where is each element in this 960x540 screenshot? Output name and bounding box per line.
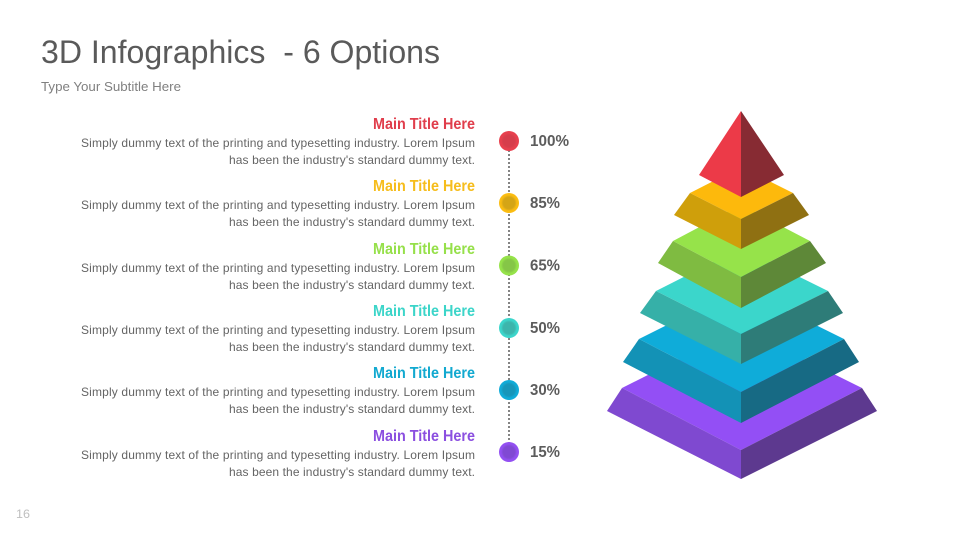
value: 65%: 65%: [530, 258, 560, 274]
marker: red dot: [499, 131, 519, 151]
marker: yellow dot: [499, 193, 519, 213]
option 3 text: [81, 241, 475, 292]
option 2 text: Main Title Here: [373, 178, 475, 195]
value: 15%: 15%: [530, 444, 560, 461]
option 5 text: [81, 365, 475, 416]
option 1 text: [81, 116, 475, 167]
option 3 text: has been the industry's standard dummy text.: [229, 278, 475, 292]
layer: yellow: [674, 167, 809, 249]
3D pyramid: [607, 111, 877, 479]
option 6 text: Main Title Here: [373, 428, 475, 445]
marker: green dot: [499, 256, 519, 276]
layer: purple base: [607, 328, 877, 479]
option 2 text: Simply dummy text of the printing and typesetting industry. Lorem Ipsum: [81, 198, 475, 212]
value: 50%: 50%: [530, 320, 560, 337]
option 3 text: Main Title Here: [373, 241, 475, 258]
option 3 text: Simply dummy text of the printing and typesetting industry. Lorem Ipsum: [81, 261, 475, 275]
option 4 text: [81, 303, 475, 354]
value: 30%: 30%: [530, 382, 560, 399]
subtitle: Type Your Subtitle Here: [41, 80, 181, 94]
option 2 text: [81, 178, 475, 229]
option 4 text: Simply dummy text of the printing and typesetting industry. Lorem Ipsum: [81, 323, 475, 337]
marker: purple dot: [499, 442, 519, 462]
title: 3D Infographics - 6 Options: [41, 34, 440, 70]
option 5 text: has been the industry's standard dummy text.: [229, 402, 475, 416]
option 6 text: has been the industry's standard dummy text.: [229, 465, 475, 479]
option 2 text: has been the industry's standard dummy text.: [229, 215, 475, 229]
option 1 text: has been the industry's standard dummy text.: [229, 153, 475, 167]
option 5 text: Simply dummy text of the printing and typesetting industry. Lorem Ipsum: [81, 385, 475, 399]
marker: blue dot: [499, 380, 519, 400]
option 1 text: Simply dummy text of the printing and typesetting industry. Lorem Ipsum: [81, 136, 475, 150]
layer: green: [658, 205, 826, 308]
value: 85%: 85%: [530, 195, 560, 212]
option 4 text: has been the industry's standard dummy text.: [229, 340, 475, 354]
option 5 text: Main Title Here: [373, 365, 475, 382]
timeline dotted connector: [508, 150, 510, 445]
layer: blue: [623, 288, 859, 423]
value: 100%: 100%: [530, 133, 569, 150]
layer: teal: [640, 248, 843, 364]
page number: 16: [16, 507, 30, 521]
option 6 text: [81, 428, 475, 479]
layer: red apex: [699, 111, 784, 197]
option 6 text: Simply dummy text of the printing and typesetting industry. Lorem Ipsum: [81, 448, 475, 462]
option 4 text: Main Title Here: [373, 303, 475, 320]
option 1 text: Main Title Here: [373, 116, 475, 133]
marker: teal dot: [499, 318, 519, 338]
